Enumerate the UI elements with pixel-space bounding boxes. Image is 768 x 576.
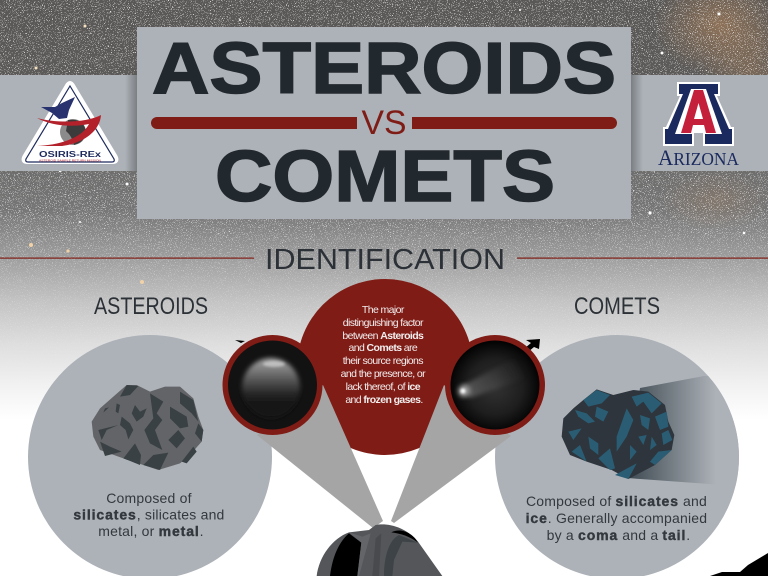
text: distinguishing factor: their source regions [343, 355, 423, 367]
photo: comet image [445, 335, 545, 435]
text: asteroid composition: Composed of [106, 490, 192, 506]
text: distinguishing factor: and the presence, or [341, 368, 426, 380]
icon: comet nucleus [562, 389, 674, 479]
text: comet composition: Composed of silicates and [526, 493, 707, 509]
logo: University of Arizona [658, 82, 739, 170]
text: distinguishing factor: between Asteroids [342, 330, 423, 342]
icon: red orbit swoosh [37, 115, 101, 146]
panel: central red callout [297, 279, 473, 455]
logo tagline: ASTEROID SAMPLE RETURN MISSION [39, 158, 101, 162]
icon: block A [663, 82, 734, 146]
icon: small black arrow [525, 339, 540, 352]
panel: comet circle [495, 335, 745, 576]
text: comet composition: ice. Generally accompanied [526, 510, 707, 526]
panel: title [137, 27, 631, 219]
icon: comet tail [627, 376, 745, 488]
panel: asteroid circle [28, 335, 272, 576]
logo wordmark: OSIRIS-REx [39, 150, 102, 159]
icon: asteroid on patch [60, 119, 86, 145]
divider bar right [412, 117, 617, 129]
text: comet composition: by a coma and a tail. [547, 527, 690, 543]
icon: mountain silhouette [710, 553, 768, 576]
icon: spacecraft [41, 97, 75, 119]
heading: asteroids column: ASTEROIDS [94, 293, 208, 320]
beam: left telescope view [257, 385, 383, 528]
background: starfield sky [0, 0, 768, 420]
photo: asteroid radar image [222, 335, 322, 435]
heading: comets column: COMETS [574, 293, 660, 320]
icon: small dark mark [235, 340, 245, 343]
logo wordmark: ARIZONA [658, 145, 739, 170]
title: vs: VS [362, 104, 406, 142]
text: distinguishing factor: and frozen gases. [345, 394, 423, 406]
side band with logos background [0, 75, 768, 171]
title: comets: COMETS [215, 137, 555, 217]
text: distinguishing factor: distinguishing factor [343, 317, 424, 329]
text: asteroid composition: metal, or metal. [98, 523, 204, 539]
text: distinguishing factor: lack thereof, of ice [346, 381, 420, 393]
text: asteroid composition: silicates, silicates and [73, 506, 225, 522]
icon: asteroid [92, 385, 203, 470]
section heading: identification: IDENTIFICATION [265, 244, 505, 276]
title: asteroids: ASTEROIDS [152, 29, 616, 109]
text: distinguishing factor: The major [362, 304, 405, 316]
beam: right telescope view [391, 385, 511, 523]
text: distinguishing factor: and Comets are [348, 342, 417, 354]
icon: telescope [317, 524, 442, 576]
divider bar left [151, 117, 357, 129]
logo: OSIRIS-REx mission patch [22, 81, 118, 164]
